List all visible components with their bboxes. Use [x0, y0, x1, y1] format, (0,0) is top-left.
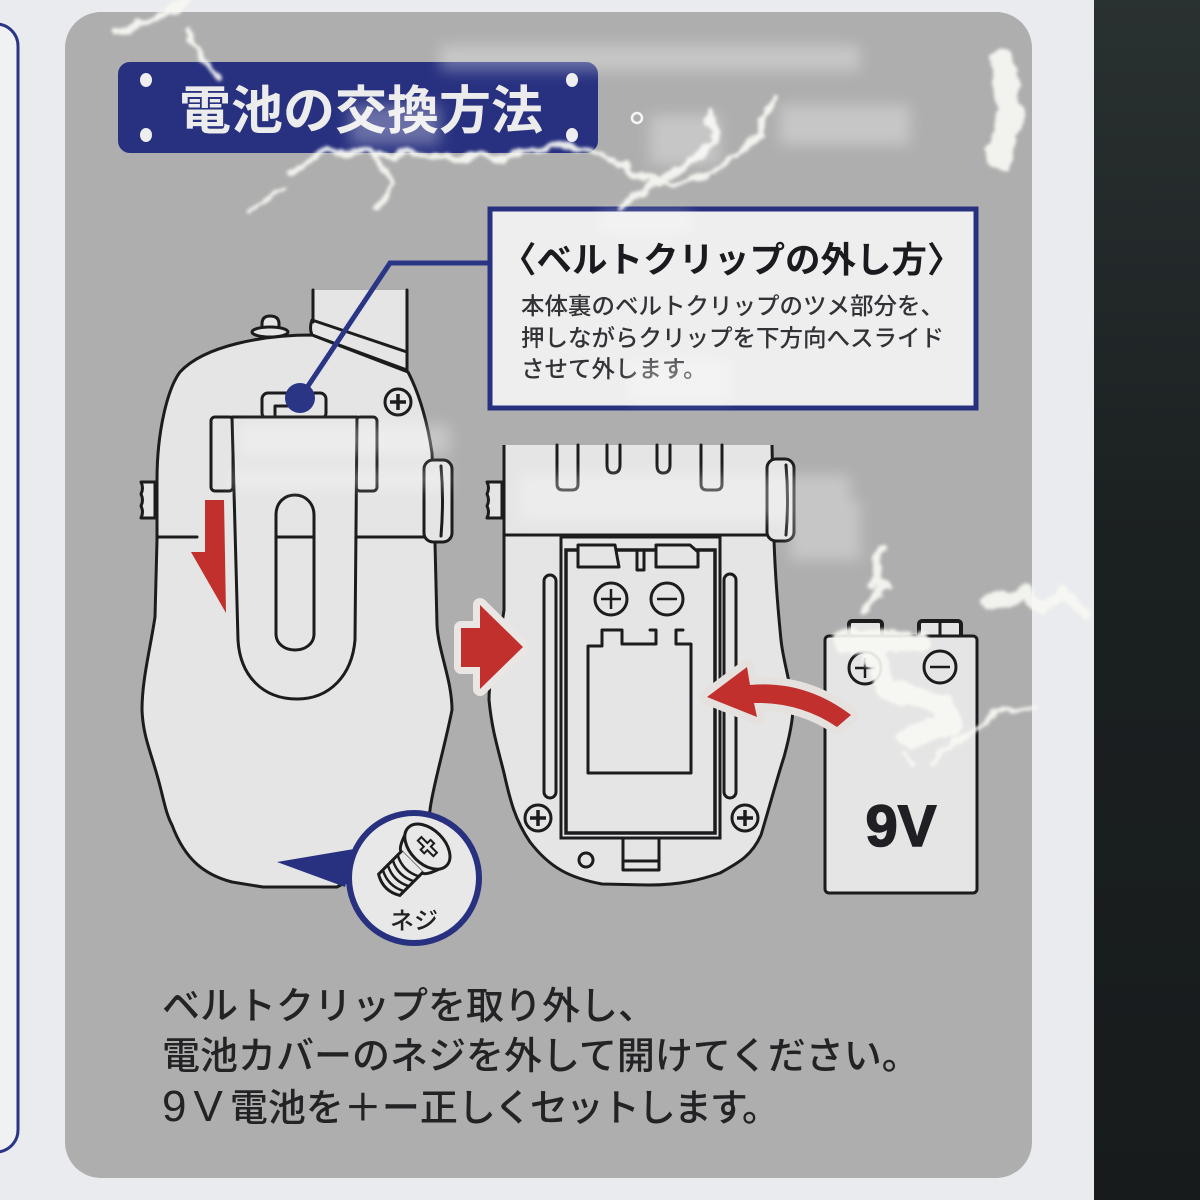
leader line with dot — [285, 263, 490, 413]
instruction text: 電池カバーのネジを外して開けてください。 — [162, 1036, 920, 1078]
antenna neck — [312, 290, 407, 370]
callout: belt clip removal: 〈ベルトクリップの外し方〉 — [501, 240, 963, 280]
dark background strip at right — [1094, 0, 1200, 1200]
instruction text — [162, 986, 920, 1131]
left device: back with belt clip — [141, 290, 452, 887]
band notches — [557, 445, 722, 490]
9V battery: 9V — [866, 794, 937, 859]
red down arrow — [191, 500, 226, 613]
screws — [525, 805, 551, 831]
screw callout — [277, 813, 479, 943]
clip slot — [276, 495, 314, 650]
clip tabs — [211, 417, 377, 491]
circle — [349, 813, 479, 943]
clip latch — [262, 393, 326, 419]
screw top right — [385, 389, 411, 415]
callout: belt clip removal: 押しながらクリップを下方向へスライド — [521, 325, 944, 351]
instruction text: ベルトクリップを取り外し、 — [162, 986, 656, 1028]
9V battery — [825, 621, 977, 893]
red insert arrow — [461, 605, 523, 689]
device body outline — [142, 335, 452, 887]
top knob — [252, 316, 288, 337]
icon: screw — [367, 816, 458, 907]
belt clip — [232, 417, 357, 699]
right knob — [424, 460, 452, 542]
pointer — [277, 849, 354, 887]
battery outline in compartment — [588, 630, 691, 773]
plastic glare — [114, 0, 1085, 765]
red curved arrow into battery slot — [707, 667, 851, 727]
instruction text: 9V電池を＋ー正しくセットします。 — [162, 1082, 778, 1131]
callout: belt clip removal: 本体裏のベルトクリップのツメ部分を、 — [521, 293, 944, 319]
side tab — [487, 482, 502, 518]
title banner: 電池の交換方法 — [179, 83, 543, 141]
upper band — [504, 534, 770, 536]
right device: battery compartment — [487, 445, 794, 885]
soft sheen patches — [230, 45, 910, 560]
side slots — [544, 574, 736, 798]
device body outline — [489, 445, 793, 885]
side tab — [141, 482, 155, 518]
neighbouring panel outline at left — [0, 24, 18, 1152]
right knob — [767, 459, 794, 541]
callout: belt clip removal: させて外します。 — [521, 356, 707, 382]
battery compartment — [561, 537, 720, 838]
callout: belt clip removal — [490, 209, 976, 408]
small ring on panel — [632, 113, 642, 123]
screw callout: ネジ — [390, 908, 438, 935]
grey panel background — [65, 12, 1032, 1178]
neck outlines — [310, 290, 407, 370]
bottom hole and latch — [579, 838, 659, 870]
title banner — [118, 62, 598, 153]
seam lines — [157, 536, 426, 538]
